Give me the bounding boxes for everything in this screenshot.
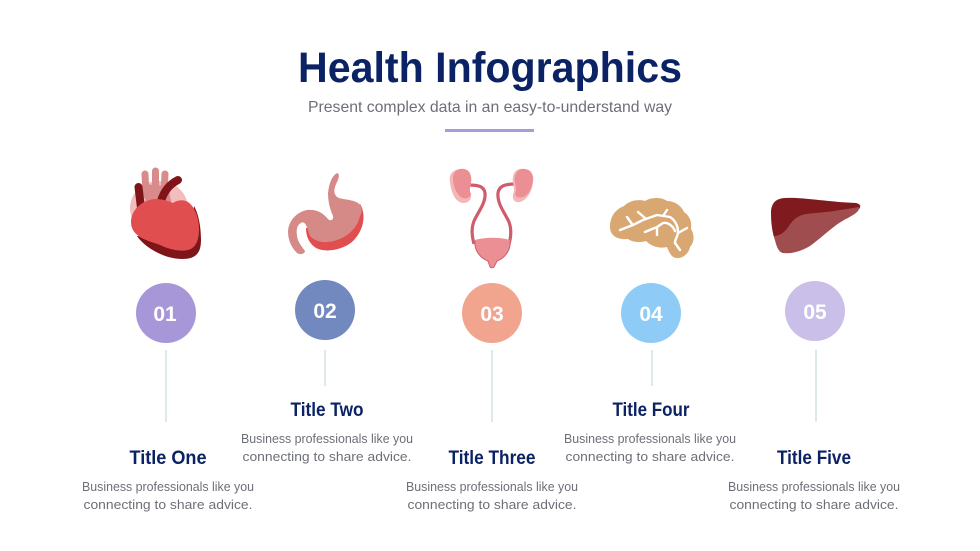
description 3: connecting to share advice. [408, 497, 576, 512]
description 1 [82, 479, 254, 512]
description 4 [564, 431, 736, 464]
icon: heart [130, 171, 201, 259]
description 4: Business professionals like you [564, 431, 736, 446]
description 5 [728, 479, 900, 512]
connector 1 [165, 350, 167, 422]
number badge 04 [621, 283, 681, 343]
description 3: Business professionals like you [406, 479, 578, 494]
column 1: heart [82, 171, 254, 512]
number badge 05 [785, 281, 845, 341]
description 3 [406, 479, 578, 512]
description 5: connecting to share advice. [730, 497, 898, 512]
column 2: stomach [241, 173, 413, 464]
number badge 05: 05 [803, 301, 827, 324]
subtitle: Present complex data in an easy-to-understand way [308, 99, 672, 116]
heading: Title Three: Title Three [448, 448, 536, 469]
column 5: liver [728, 198, 900, 512]
description 2: connecting to share advice. [242, 449, 412, 464]
icon: stomach [288, 173, 364, 254]
title underline [445, 129, 534, 132]
number badge 02: 02 [313, 300, 337, 323]
title: Health Infographics [298, 44, 682, 92]
icon: liver [771, 198, 860, 253]
icon: brain [610, 198, 694, 258]
connector 4 [651, 350, 653, 386]
description 5: Business professionals like you [728, 479, 900, 494]
number badge 02 [295, 280, 355, 340]
number badge 01: 01 [153, 303, 177, 326]
description 2: Business professionals like you [241, 431, 413, 446]
heading: Title Five: Title Five [777, 448, 851, 469]
heading: Title Four: Title Four [612, 400, 690, 421]
icon: kidneys and bladder [450, 169, 533, 268]
description 1: Business professionals like you [82, 479, 254, 494]
connector 5 [815, 350, 817, 422]
description 1: connecting to share advice. [84, 497, 253, 512]
number badge 03: 03 [480, 303, 504, 326]
column 4: brain [564, 198, 736, 464]
column 3: urinary system [406, 169, 578, 512]
heading: Title One: Title One [130, 448, 206, 469]
number badge 03 [462, 283, 522, 343]
description 2 [241, 431, 413, 464]
description 4: connecting to share advice. [566, 449, 734, 464]
number badge 04: 04 [639, 303, 663, 326]
number badge 01 [136, 283, 196, 343]
connector 2 [324, 350, 326, 386]
heading: Title Two: Title Two [290, 400, 364, 421]
connector 3 [491, 350, 493, 422]
